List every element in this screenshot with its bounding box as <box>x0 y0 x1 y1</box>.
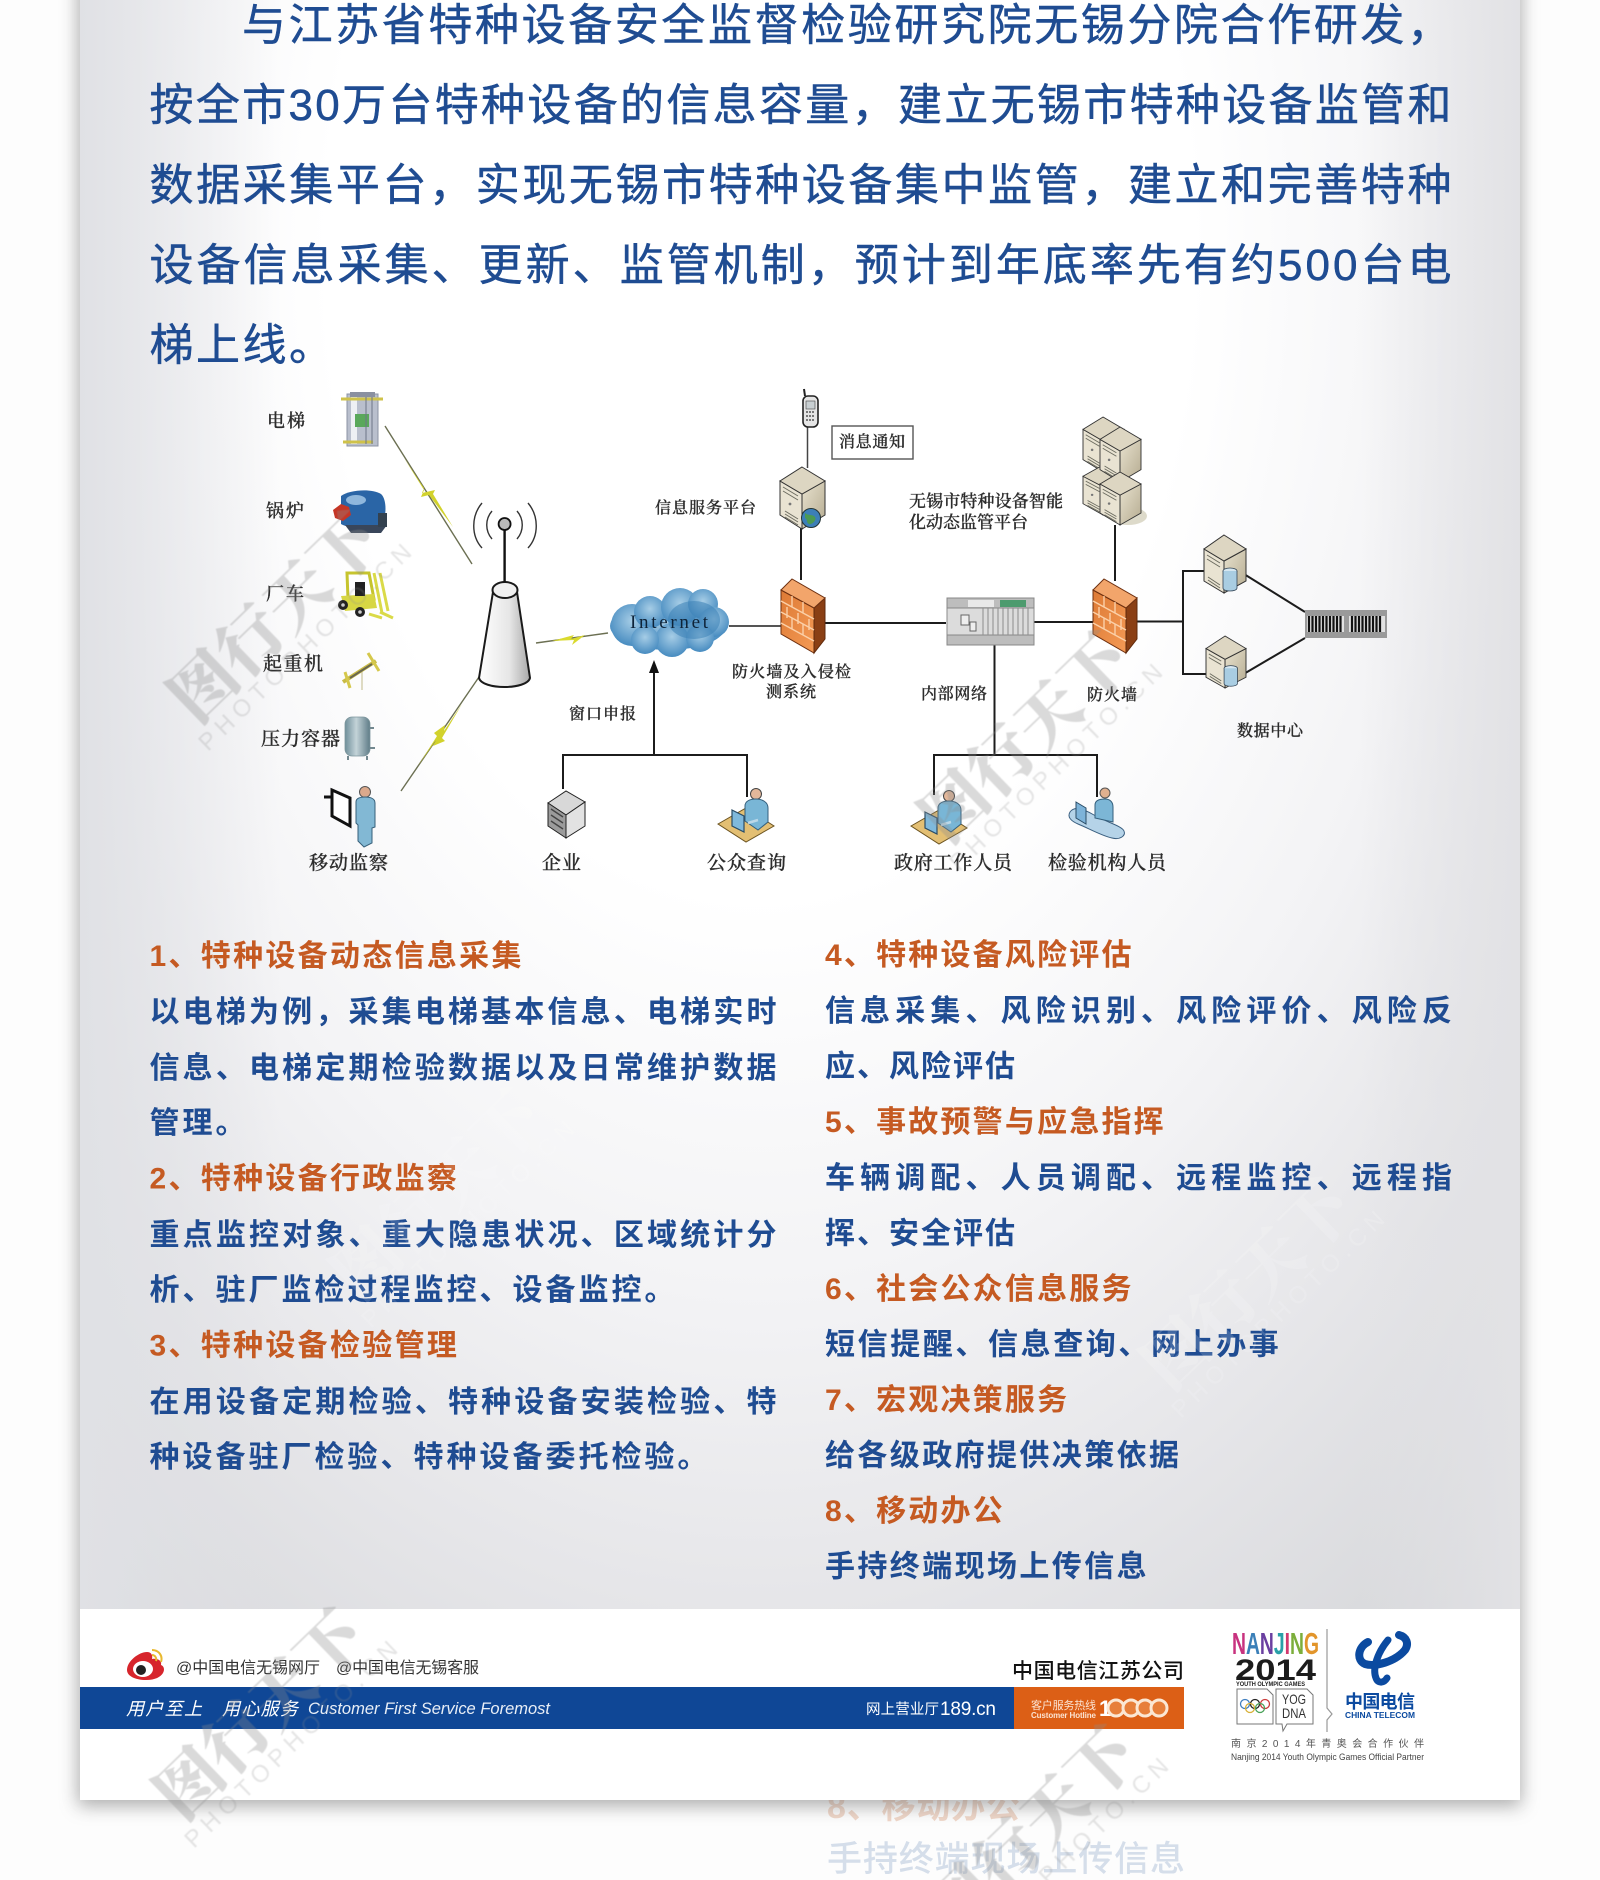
blue slogan bar <box>80 1687 1014 1729</box>
label: elevator: 电梯 <box>267 407 305 433</box>
section 5 <box>825 1106 1452 1250</box>
orange hotline box: Customer Hotline <box>1031 1711 1097 1720</box>
weibo accounts <box>176 1659 479 1677</box>
partner caption: Nanjing 2014 Youth Olympic Games Official Partner <box>1231 1752 1424 1763</box>
section 7: 7、宏观决策服务 <box>825 1384 1069 1417</box>
logo divider <box>1327 1629 1332 1732</box>
logo: Nanjing 2014 youth olympic: 2014 <box>1235 1654 1316 1687</box>
watermark: faint list right: 图行天下 <box>1116 1154 1374 1407</box>
intro paragraph <box>150 1 1452 370</box>
section 5: 挥、安全评估 <box>825 1218 1017 1250</box>
bottom ghost reflection text <box>827 1788 1185 1879</box>
watermark: faint list left: PHOTOPHOTO.CN <box>356 1116 580 1333</box>
icon: storage rack <box>1305 610 1387 638</box>
icon: mobile inspector <box>324 786 375 847</box>
orange hotline box: 客户服务热线 <box>1031 1698 1096 1712</box>
orange hotline box: 1 <box>1099 1696 1111 1721</box>
section 7: 给各级政府提供决策依据 <box>825 1440 1181 1472</box>
icon: internet cloud <box>610 588 729 657</box>
section 6 <box>825 1273 1281 1362</box>
icon: forklift <box>338 573 393 618</box>
section 1: 信息、电梯定期检验数据以及日常维护数据 <box>150 1052 776 1085</box>
logo: China Telecom: 中国电信 <box>1345 1692 1415 1712</box>
intro paragraph: 按全市30万台特种设备的信息容量，建立无锡市特种设备监管和 <box>150 81 1452 130</box>
watermark: faint list right: PHOTOPHOTO.CN <box>1166 1206 1390 1423</box>
section 4: 4、特种设备风险评估 <box>825 939 1134 972</box>
watermark: diagram left: 图行天下 <box>143 487 401 740</box>
section 1 <box>150 940 776 1140</box>
intro paragraph: 梯上线。 <box>150 321 336 370</box>
intro paragraph: 数据采集平台，实现无锡市特种设备集中监管，建立和完善特种 <box>150 161 1452 210</box>
watermark: footer left: 图行天下 <box>129 1584 387 1837</box>
icon: inspection staff <box>1069 788 1124 839</box>
orange hotline box <box>1014 1687 1184 1729</box>
lightning: elevator to tower <box>385 426 472 564</box>
section 6: 短信提醒、信息查询、网上办事 <box>825 1328 1281 1362</box>
section 8 <box>825 1495 1149 1584</box>
section 3 <box>150 1330 776 1474</box>
icon: boiler <box>333 490 387 533</box>
weibo accounts: @中国电信无锡客服 <box>336 1659 479 1677</box>
watermark: footer left: PHOTOPHOTO.CN <box>179 1636 403 1853</box>
label: firewall and IDS: 防火墙及入侵检 <box>732 659 851 682</box>
section 2: 重点监控对象、重大隐患状况、区域统计分 <box>150 1219 776 1252</box>
icon: government worker <box>911 790 967 844</box>
arrow into internet <box>649 660 659 673</box>
watermark: faint list left: 图行天下 <box>306 1064 564 1317</box>
label: monitoring platform: 无锡市特种设备智能 <box>909 487 1063 512</box>
callout: message notification <box>832 426 913 459</box>
section 1: 1、特种设备动态信息采集 <box>150 940 524 973</box>
section 2: 2、特种设备行政监察 <box>150 1162 459 1196</box>
watermark: diagram right: PHOTOPHOTO.CN <box>944 659 1168 876</box>
icon: network switch chassis <box>947 598 1034 645</box>
lightning: inspector to tower <box>401 677 479 791</box>
section 4: 信息采集、风险识别、风险评价、风险反 <box>825 995 1452 1028</box>
label: public query: 公众查询 <box>707 848 786 875</box>
label: inspection staff: 检验机构人员 <box>1048 848 1168 875</box>
blue slogan bar: 189.cn <box>940 1699 996 1720</box>
icon: database server bottom <box>1206 636 1246 688</box>
partner caption <box>1231 1737 1424 1763</box>
section 3: 在用设备定期检验、特种设备安装检验、特 <box>150 1386 776 1419</box>
label: info service platform: 信息服务平台 <box>655 495 756 518</box>
section 6: 6、社会公众信息服务 <box>825 1273 1134 1306</box>
section 8: 手持终端现场上传信息 <box>825 1550 1149 1584</box>
icon: public query person <box>718 788 774 842</box>
icon: database server top <box>1204 535 1246 593</box>
icon: pressure vessel <box>345 717 375 760</box>
icon: antenna tower <box>474 503 536 687</box>
icon: crane <box>343 653 379 690</box>
logo: Nanjing 2014 youth olympic <box>1232 1626 1319 1731</box>
label: internal network: 内部网络 <box>921 681 987 704</box>
icon: web server <box>780 467 825 529</box>
label: crane: 起重机 <box>263 649 323 676</box>
bottom ghost reflection text: 手持终端现场上传信息 <box>827 1840 1185 1879</box>
label: mobile inspection: 移动监察 <box>309 848 388 875</box>
network topology diagram <box>261 389 1387 875</box>
section 4 <box>825 939 1452 1084</box>
watermark: diagram right: 图行天下 <box>894 607 1152 860</box>
icon: server stack <box>1083 417 1147 525</box>
logo: Nanjing 2014 youth olympic: NANJING <box>1232 1626 1319 1661</box>
icon: enterprise building <box>548 791 585 838</box>
callout: message notification: 消息通知 <box>839 429 905 452</box>
logo: Nanjing 2014 youth olympic: DNA <box>1282 1705 1307 1721</box>
section 2 <box>150 1162 776 1307</box>
watermark: diagram left: PHOTOPHOTO.CN <box>193 539 417 756</box>
logo: Nanjing 2014 youth olympic: YOG <box>1282 1691 1306 1707</box>
section 3: 种设备驻厂检验、特种设备委托检验。 <box>150 1441 710 1474</box>
label: enterprise: 企业 <box>542 848 581 875</box>
section 1: 以电梯为例，采集电梯基本信息、电梯实时 <box>150 996 776 1029</box>
bottom ghost reflection text: 8、移动办公 <box>827 1788 1020 1826</box>
weibo accounts: @中国电信无锡网厅 <box>176 1659 320 1677</box>
icon: mobile phone <box>803 389 818 427</box>
main gradient panel <box>80 0 1520 1610</box>
label: pressure vessel: 压力容器 <box>261 724 340 751</box>
label: monitoring platform <box>909 487 1063 533</box>
panel left edge shading <box>80 0 280 1610</box>
label: firewall and IDS: 测系统 <box>766 679 817 702</box>
footer panel <box>80 1609 1520 1800</box>
blue slogan bar: 用心服务 <box>222 1699 300 1719</box>
blue slogan bar: 用户至上 <box>126 1699 203 1719</box>
label: government staff: 政府工作人员 <box>894 848 1014 875</box>
panel right edge shading <box>1360 0 1520 1610</box>
label: window filing: 窗口申报 <box>569 701 636 724</box>
logo: China Telecom <box>1345 1635 1415 1720</box>
label: firewall: 防火墙 <box>1087 682 1137 705</box>
icon: internet cloud: Internet <box>630 612 709 633</box>
lightning: tower to internet <box>536 633 608 645</box>
label: monitoring platform: 化动态监管平台 <box>909 508 1028 533</box>
intro paragraph: 设备信息采集、更新、监管机制，预计到年底率先有约500台电 <box>150 241 1452 290</box>
label: forklift: 厂车 <box>266 580 304 606</box>
icon: firewall <box>1093 579 1137 653</box>
logo: China Telecom: CHINA TELECOM <box>1345 1711 1415 1720</box>
section 4: 应、风险评估 <box>825 1050 1017 1084</box>
connector lines <box>563 427 1305 797</box>
icon: elevator <box>341 392 383 446</box>
company name: 中国电信江苏公司 <box>1012 1660 1184 1683</box>
section 5: 车辆调配、人员调配、远程监控、远程指 <box>825 1162 1452 1195</box>
partner caption: 南京2014年青奥会合作伙伴 <box>1231 1737 1424 1750</box>
section 2: 析、驻厂监检过程监控、设备监控。 <box>150 1274 678 1307</box>
logo: Nanjing 2014 youth olympic: YOUTH OLYMPIC GAMES <box>1236 1682 1305 1688</box>
icon: firewall with intrusion detection <box>781 579 825 653</box>
blue slogan bar: 网上营业厅 <box>866 1701 939 1718</box>
blue slogan bar: Customer First Service Foremost <box>308 1700 551 1718</box>
icon: weibo logo <box>127 1650 164 1680</box>
section 8: 8、移动办公 <box>825 1495 1005 1528</box>
section 1: 管理。 <box>150 1107 248 1140</box>
left feature list <box>150 940 776 1474</box>
intro paragraph: 与江苏省特种设备安全监督检验研究院无锡分院合作研发， <box>242 1 1451 50</box>
label: data center: 数据中心 <box>1237 718 1304 741</box>
label: firewall and IDS <box>732 659 851 702</box>
section 7 <box>825 1384 1181 1472</box>
section 3: 3、特种设备检验管理 <box>150 1330 459 1362</box>
label: boiler: 锅炉 <box>266 497 304 523</box>
right feature list <box>825 939 1452 1584</box>
section 5: 5、事故预警与应急指挥 <box>825 1106 1166 1139</box>
